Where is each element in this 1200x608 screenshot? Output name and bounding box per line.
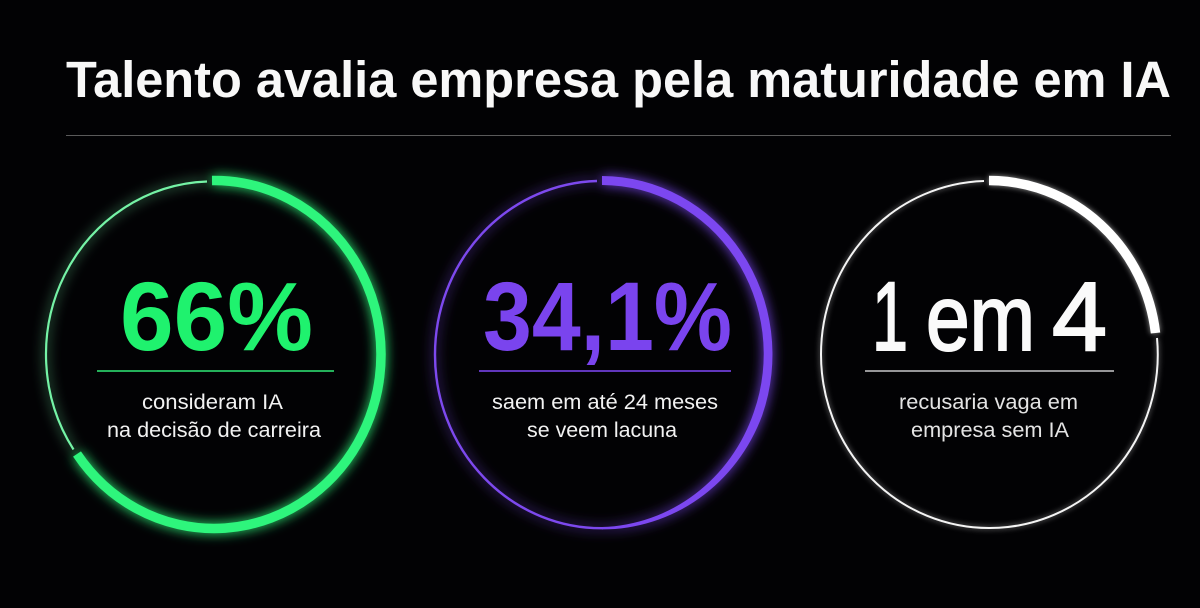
- value: 34,1%: 34,1%: [483, 262, 732, 371]
- caption: 1 em 4: recusaria vaga em: [899, 390, 1078, 414]
- panel: 34,1% stat: [435, 176, 772, 529]
- value: 1 em 4: 4: [1052, 262, 1107, 371]
- panel: 66% stat: [46, 180, 381, 528]
- caption: 66%: [107, 390, 321, 442]
- caption: 34,1%: [492, 390, 718, 442]
- caption: 34,1%: se veem lacuna: [527, 418, 677, 442]
- ring: 34,1% progress: [435, 176, 772, 529]
- value: 1 em 4: [872, 262, 1107, 371]
- value: 1 em 4: em: [926, 266, 1035, 370]
- caption: 1 em 4: empresa sem IA: [911, 418, 1070, 442]
- caption: 66%: na decisão de carreira: [107, 418, 321, 442]
- caption: 34,1%: saem em até 24 meses: [492, 390, 718, 414]
- caption: 66%: consideram IA: [142, 390, 284, 414]
- ring: 1 em 4 progress: [821, 180, 1158, 528]
- panel: 1 em 4 stat: [821, 180, 1158, 528]
- value: 1 em 4: 1: [872, 262, 908, 371]
- value: 66%: 66%: [120, 262, 313, 371]
- ring: 66% progress: [46, 180, 381, 528]
- title: Talento avalia empresa pela maturidade em IA: [66, 51, 1171, 108]
- caption: 1 em 4: [899, 390, 1078, 442]
